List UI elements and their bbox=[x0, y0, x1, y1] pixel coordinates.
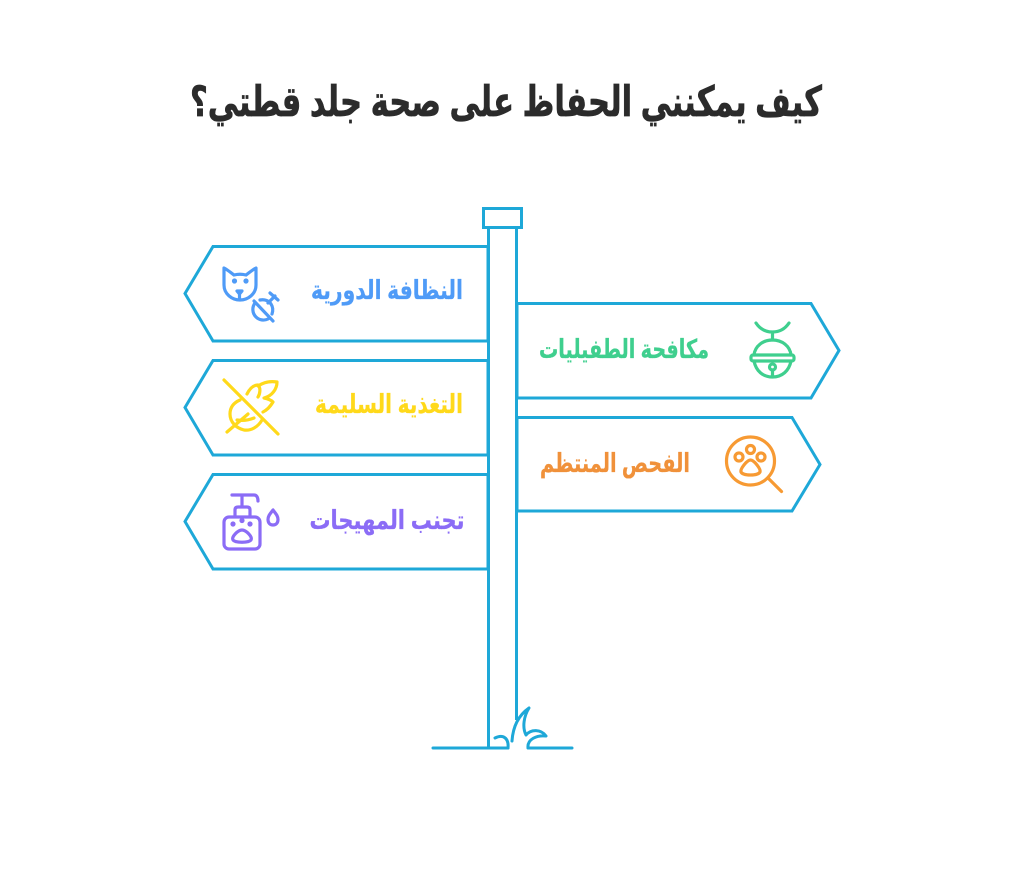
icon: grass tuft bbox=[495, 708, 546, 748]
title: كيف يمكنني الحفاظ على صحة جلد قطتي؟ bbox=[190, 79, 823, 126]
icon: cat bell bbox=[751, 323, 794, 377]
icon: crossed-out leaf bbox=[224, 380, 278, 434]
label: parasite control: مكافحة الطفيليات bbox=[539, 334, 709, 364]
panel: avoid irritants sign bbox=[185, 474, 488, 569]
panel: proper nutrition sign bbox=[185, 360, 488, 455]
signpost pole bbox=[433, 208, 572, 748]
label: proper nutrition: التغذية السليمة bbox=[315, 389, 463, 419]
label: avoid irritants: تجنب المهيجات bbox=[310, 505, 464, 536]
panel: parasite control sign bbox=[517, 304, 839, 398]
label: regular checkup: الفحص المنتظم bbox=[540, 448, 690, 479]
icon: cat with ornament bbox=[224, 268, 278, 321]
icon: paw shampoo bottle bbox=[224, 495, 278, 549]
label: regular cleaning: النظافة الدورية bbox=[311, 275, 463, 306]
panel: regular cleaning sign bbox=[185, 246, 488, 341]
icon: paw magnifier bbox=[726, 437, 782, 492]
panel: regular checkup sign bbox=[517, 418, 820, 511]
